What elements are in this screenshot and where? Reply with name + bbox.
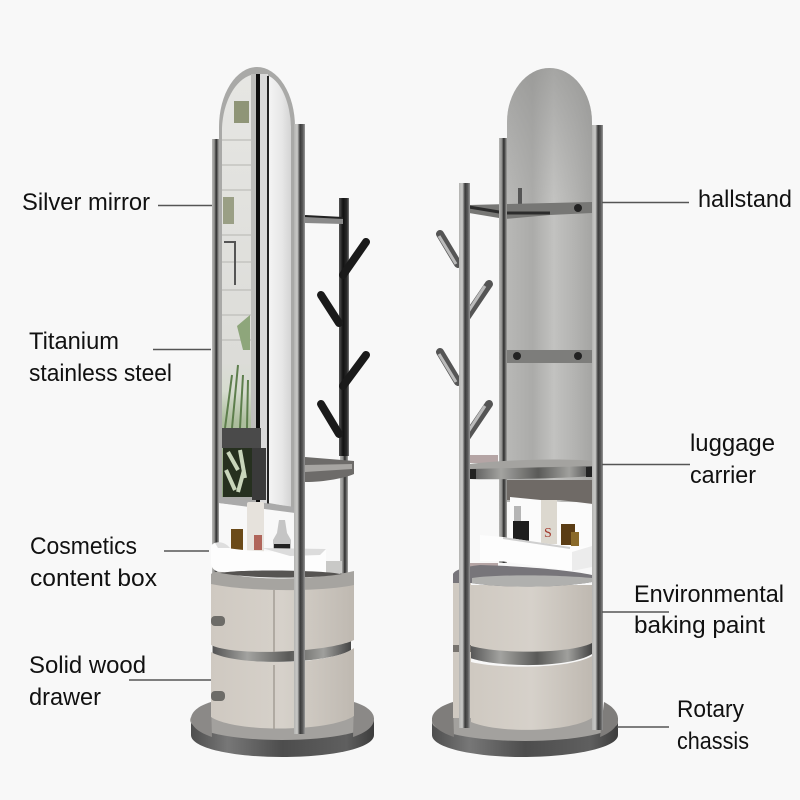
label: silver mirror: Silver mirror xyxy=(22,189,150,216)
cosmetics bottles, rear: S xyxy=(544,526,552,541)
label: solid wood drawer xyxy=(29,652,211,711)
label: luggage carrier xyxy=(602,430,775,489)
silver mirror xyxy=(219,67,295,513)
label: environmental baking paint xyxy=(602,581,784,639)
right post, rear xyxy=(592,125,603,730)
label: luggage carrier: luggage xyxy=(690,430,775,457)
label: hallstand: hallstand xyxy=(698,186,792,213)
drawers, front xyxy=(211,570,354,729)
lower shadow panel xyxy=(505,480,593,504)
label: environmental baking paint: Environmental xyxy=(634,581,784,608)
cosmetics bottles, rear xyxy=(513,500,579,546)
label: environmental baking paint: baking paint xyxy=(634,612,765,639)
rear panel xyxy=(507,68,592,502)
luggage tray, front xyxy=(305,457,354,482)
label: titanium stainless steel xyxy=(29,328,211,387)
left post, rear xyxy=(499,138,507,563)
product: front view with mirror xyxy=(190,67,374,757)
luggage carrier, rear xyxy=(470,455,594,479)
label: rotary chassis: Rotary xyxy=(677,696,744,723)
label: rotary chassis xyxy=(617,696,749,755)
label: titanium stainless steel: stainless steel xyxy=(29,360,172,387)
white gap behind shelves xyxy=(510,497,592,560)
coat rack, front xyxy=(305,198,366,574)
rotary base, front xyxy=(190,700,374,757)
coat hooks, rear xyxy=(439,234,489,438)
left post, front xyxy=(212,139,219,704)
middle mounting bracket with screws xyxy=(505,350,593,363)
drawers, rear xyxy=(453,563,592,730)
cosmetics box, rear xyxy=(480,535,592,571)
label: solid wood drawer: Solid wood xyxy=(29,652,146,679)
product: rear view xyxy=(432,68,618,757)
right post, front xyxy=(294,124,305,734)
label: cosmetics content box: content box xyxy=(30,565,157,592)
rotary base, rear xyxy=(432,702,618,757)
cosmetics content box, front xyxy=(211,542,342,577)
rack post, rear xyxy=(459,183,470,728)
label: luggage carrier: carrier xyxy=(690,462,756,489)
label: solid wood drawer: drawer xyxy=(29,684,101,711)
top mounting bracket with screws xyxy=(469,188,592,219)
label: rotary chassis: chassis xyxy=(677,728,749,755)
label: cosmetics content box: Cosmetics xyxy=(30,533,137,560)
cosmetics bottles, front xyxy=(231,502,291,554)
label: titanium stainless steel: Titanium xyxy=(29,328,119,355)
label: cosmetics content box xyxy=(30,533,209,592)
